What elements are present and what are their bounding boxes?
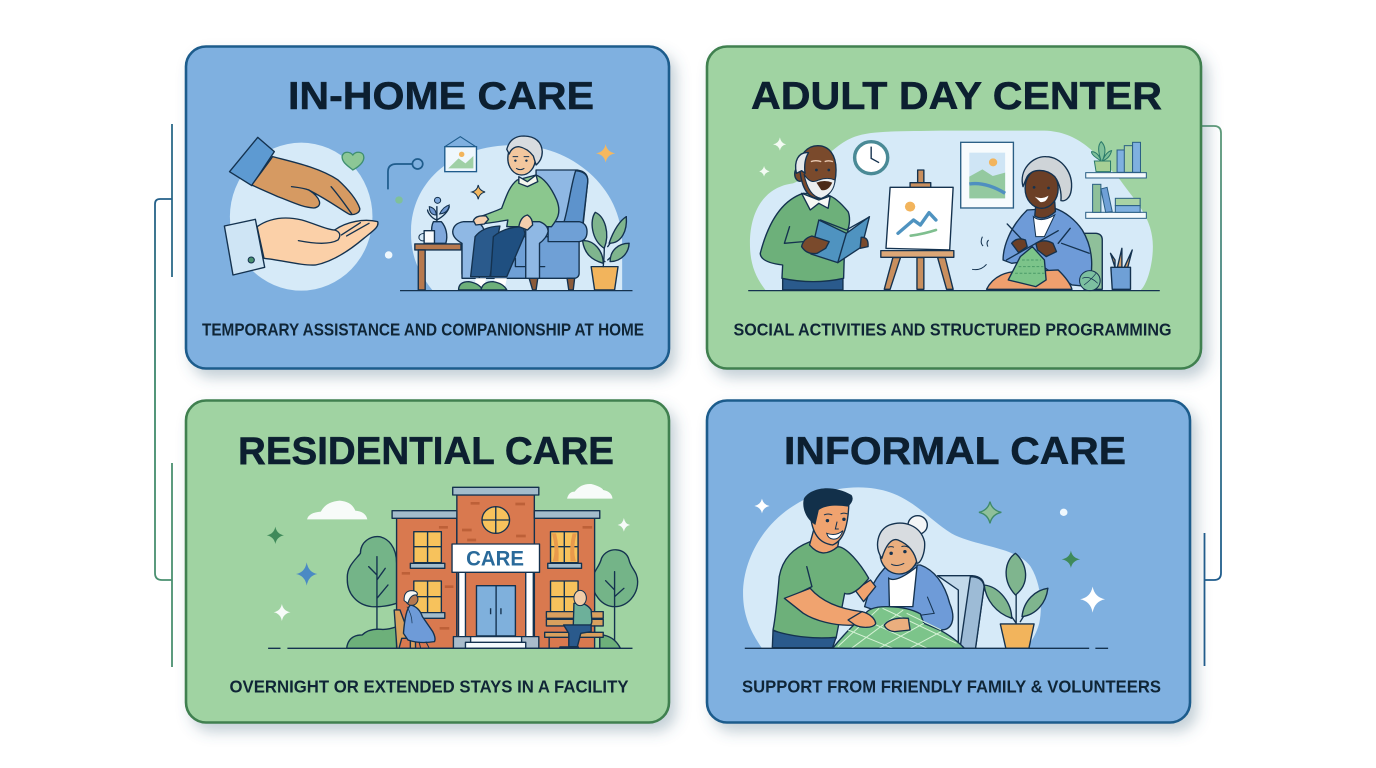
- illustration: care facility: [267, 484, 638, 648]
- illustration: care facility: CARE: [466, 546, 524, 571]
- heading: in-home care: IN-HOME CARE: [288, 75, 594, 118]
- description: TEMPORARY ASSISTANCE AND COMPANIONSHIP AT HOME: [202, 320, 644, 340]
- illustration: activity room: [750, 131, 1153, 290]
- illustration: woman knitting: [972, 157, 1102, 291]
- heading: residential care: RESIDENTIAL CARE: [238, 430, 614, 473]
- description: SOCIAL ACTIVITIES AND STRUCTURED PROGRAMMING: [734, 320, 1172, 340]
- illustration: caregiver with senior: [743, 487, 1108, 648]
- illustration: senior in armchair: [400, 136, 632, 291]
- panel: informal care: [707, 400, 1190, 722]
- illustration: caring hands: [224, 137, 423, 291]
- card background: [186, 400, 669, 722]
- illustration: shelves and pencil cup: [748, 142, 1160, 291]
- illustration: man reading book: [760, 146, 869, 290]
- connector lines: right: [1202, 126, 1221, 666]
- description: SUPPORT FROM FRIENDLY FAMILY & VOLUNTEERS: [742, 676, 1161, 696]
- panel: in-home care: [186, 46, 669, 368]
- card background: [707, 46, 1201, 368]
- illustration: residents outside: [268, 590, 632, 648]
- card background: [186, 46, 669, 368]
- heading: informal care: INFORMAL CARE: [784, 430, 1126, 473]
- description: OVERNIGHT OR EXTENDED STAYS IN A FACILITY: [230, 676, 629, 696]
- illustration: easel: [881, 170, 954, 289]
- connector lines: left: [155, 124, 172, 667]
- heading: adult day center: ADULT DAY CENTER: [751, 75, 1162, 118]
- card background: [707, 400, 1190, 722]
- panel: adult day center: [707, 46, 1201, 368]
- panel: residential care: [186, 400, 669, 722]
